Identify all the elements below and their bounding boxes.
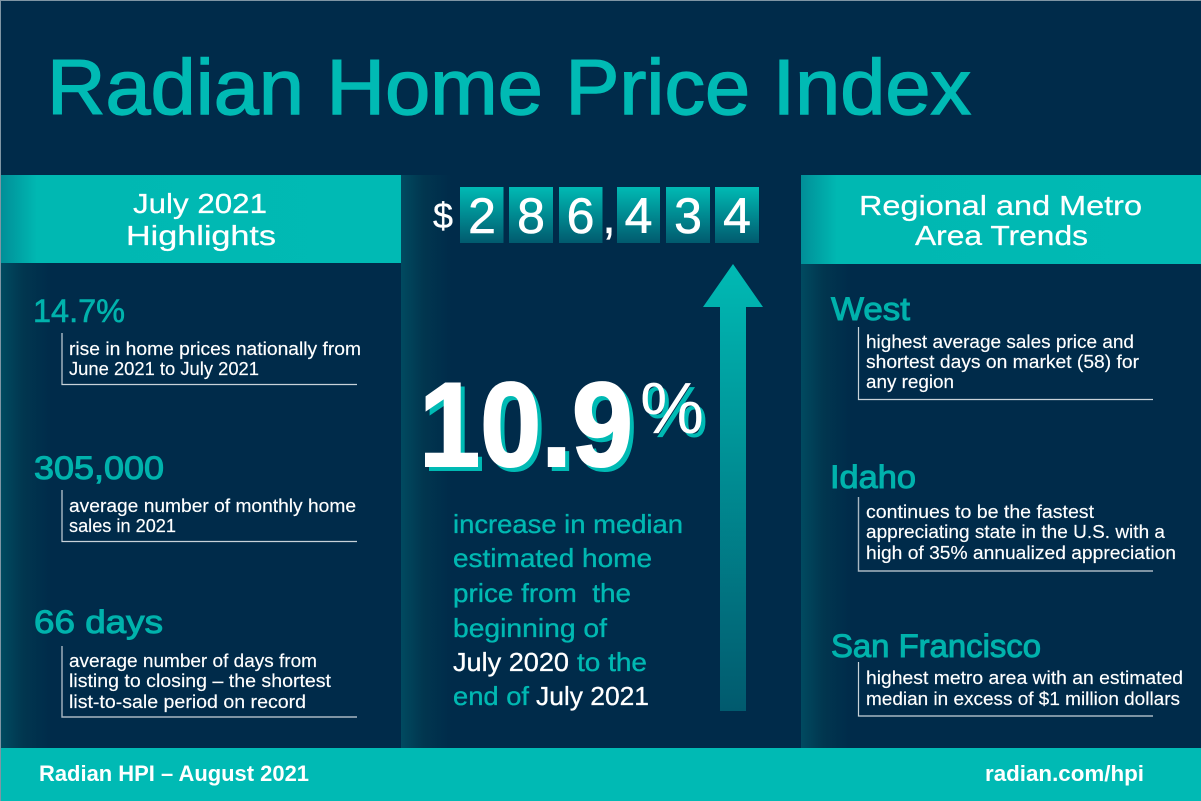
stat: 66 days: average number of days from bbox=[69, 651, 317, 671]
stat: 66 days: 66 days bbox=[34, 604, 163, 640]
panel: July 2021 highlights bbox=[1, 175, 401, 748]
big figure: 10.9%: 10.9 bbox=[423, 362, 637, 496]
stat: 305,000: 305,000 bbox=[34, 450, 164, 486]
region: San Francisco: median in excess of $1 million dollars bbox=[866, 689, 1180, 709]
big figure: 10.9%: % bbox=[644, 373, 708, 453]
price counter: $ bbox=[433, 195, 453, 236]
region: San Francisco bbox=[831, 628, 1183, 716]
price counter: 6 bbox=[567, 188, 594, 244]
stat: 14.7%: 14.7% bbox=[33, 293, 125, 329]
stat: 14.7% bbox=[33, 293, 361, 384]
region: San Francisco: San Francisco bbox=[831, 628, 1041, 664]
footer bar bbox=[1, 748, 1201, 801]
description text: estimated home bbox=[453, 543, 652, 573]
stat: 305,000: average number of monthly home bbox=[69, 496, 356, 516]
footer text: edition: Radian HPI – August 2021 bbox=[39, 761, 309, 786]
heading: Regional and Metro Area Trends bbox=[801, 175, 1201, 264]
region: Idaho: appreciating state in the U.S. with a bbox=[866, 522, 1166, 542]
description text: to the bbox=[577, 647, 647, 677]
heading: July 2021 Highlights: July 2021 bbox=[133, 188, 267, 219]
footer text: url: radian.com/hpi bbox=[985, 761, 1144, 786]
region: Idaho bbox=[830, 459, 1176, 571]
region: West: highest average sales price and bbox=[866, 332, 1134, 352]
big figure: 10.9%: 10.9 bbox=[419, 358, 633, 492]
region: Idaho: continues to be the fastest bbox=[866, 502, 1094, 522]
heading: Regional and Metro Area Trends: Area Trends bbox=[915, 220, 1088, 251]
description text: beginning of bbox=[453, 613, 608, 643]
region: West: shortest days on market (58) for bbox=[866, 352, 1139, 372]
price counter: 4 bbox=[625, 188, 652, 244]
price counter: 8 bbox=[517, 188, 545, 244]
description text: July 2021 bbox=[536, 681, 649, 711]
region: West: West bbox=[831, 291, 910, 327]
stat: 66 days: list-to-sale period on record bbox=[69, 692, 306, 712]
stat: 14.7%: rise in home prices nationally from bbox=[69, 339, 361, 359]
stat: 305,000: sales in 2021 bbox=[69, 516, 176, 536]
region: West: any region bbox=[866, 372, 954, 392]
description text: end of bbox=[453, 681, 530, 711]
price counter: 4 bbox=[723, 188, 751, 244]
heading: July 2021 Highlights: Highlights bbox=[126, 220, 276, 251]
big figure: 10.9%: % bbox=[640, 369, 704, 449]
description text: price from the bbox=[453, 578, 631, 608]
panel: regional and metro area trends bbox=[801, 175, 1201, 748]
region: San Francisco: highest metro area with an estimated bbox=[866, 668, 1183, 688]
heading: Regional and Metro Area Trends: Regional and Metro bbox=[859, 190, 1142, 221]
heading: July 2021 Highlights bbox=[1, 175, 401, 263]
description text bbox=[453, 509, 683, 711]
title: Radian Home Price Index bbox=[47, 43, 971, 131]
region: Idaho: high of 35% annualized appreciation bbox=[866, 543, 1176, 563]
description text: increase in median bbox=[453, 509, 683, 539]
price counter: , bbox=[602, 188, 616, 244]
price counter: 3 bbox=[674, 188, 702, 244]
price counter: 2 bbox=[468, 188, 496, 244]
description text: July 2020 bbox=[453, 647, 569, 677]
region: West bbox=[831, 291, 1153, 400]
stat: 14.7%: June 2021 to July 2021 bbox=[69, 359, 259, 379]
arrow: upward bbox=[703, 264, 763, 711]
region: Idaho: Idaho bbox=[830, 459, 916, 495]
stat: 305,000 bbox=[34, 450, 357, 542]
stat: 66 days: listing to closing – the shortest bbox=[69, 671, 331, 691]
price counter bbox=[433, 187, 759, 244]
stat: 66 days bbox=[34, 604, 357, 717]
panel: center national figure bbox=[401, 175, 763, 748]
